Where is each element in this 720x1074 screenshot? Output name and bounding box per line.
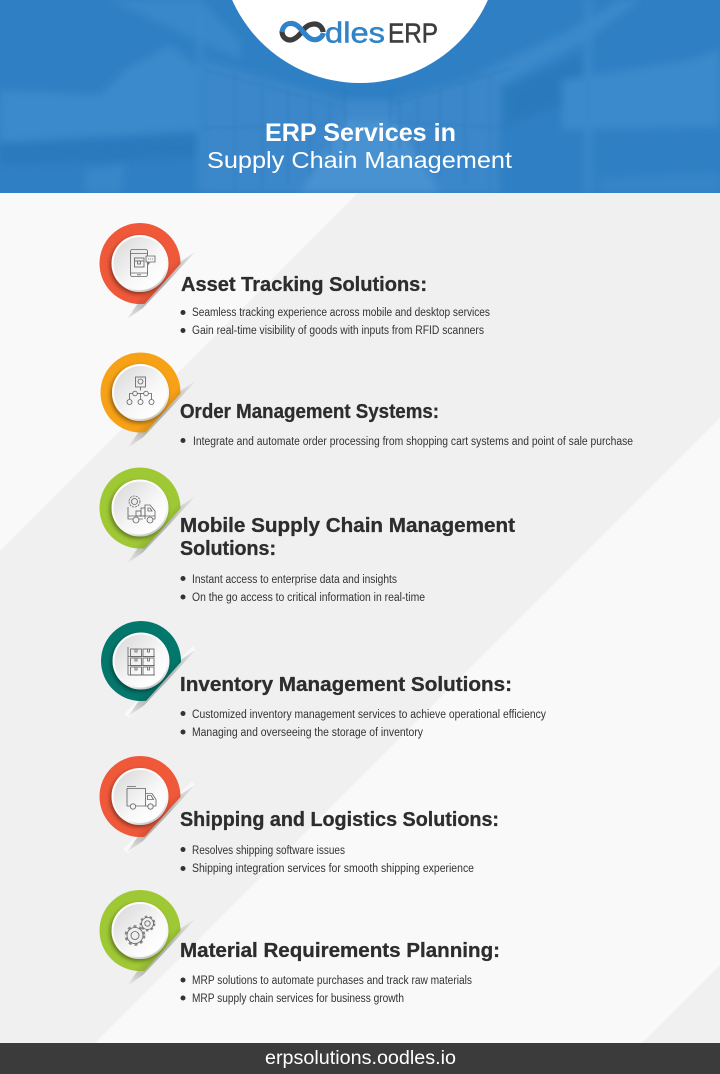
bullet list: Managing and overseeing the storage of inventory [192,727,423,739]
page background [0,193,720,1043]
heading: Order Management Systems: [180,400,439,423]
title [207,119,513,173]
bullet list: MRP supply chain services for business growth [192,993,404,1005]
badge: shipping [100,756,195,854]
icon: org tree [127,377,154,404]
bullet list: Seamless tracking experience across mobile and desktop services [192,307,490,319]
heading: Mobile Supply Chain Management [180,514,515,537]
heading: Solutions: [180,537,276,560]
icon: warehouse racks [128,647,155,675]
icon: delivery truck [127,786,156,809]
bullet list: On the go access to critical information in real-time [192,592,425,604]
heading: Shipping and Logistics Solutions: [180,808,499,831]
section: Order Management Systems [100,352,633,448]
icon: phone with parcel [130,250,155,276]
footer bar: erpsolutions.oodles.io [265,1048,456,1069]
title: Supply Chain Management [207,147,513,173]
header banner: blurred warehouse photo [0,0,720,193]
icon: gear and truck [128,496,155,523]
badge: material planning [100,890,195,986]
footer bar [0,1043,720,1074]
icon: gears [126,916,154,945]
badge: mobile supply chain [100,468,195,564]
heading: Asset Tracking Solutions: [181,273,427,296]
section: Asset Tracking Solutions [100,223,490,337]
badge: inventory [101,621,196,718]
bullet list [180,574,425,604]
white logo semicircle [220,0,500,83]
bullet list: MRP solutions to automate purchases and track raw materials [192,975,472,987]
bullet list [180,845,474,875]
bullet list [180,307,490,337]
icon: infinity mark [282,23,324,40]
logo: oodlesERP [282,18,438,50]
badge: asset tracking [100,223,195,319]
logo wordmark: dles [325,18,385,50]
bullet list [180,709,546,739]
shelf detail [205,68,510,190]
bullet list: Customized inventory management services to achieve operational efficiency [192,709,546,721]
heading: Material Requirements Planning: [180,939,500,962]
title: ERP Services in [265,119,456,147]
section: Material Requirements Planning [100,890,500,1005]
badge: order management [100,352,196,448]
heading: Inventory Management Solutions: [180,673,512,696]
bullet list [180,975,472,1005]
bullet list: Shipping integration services for smooth shipping experience [192,863,474,875]
heading [180,514,515,560]
section: Inventory Management Solutions [101,621,546,739]
section: Shipping and Logistics Solutions [100,756,499,875]
bullet list: Integrate and automate order processing from shopping cart systems and point of sale purchase [193,436,633,448]
bullet list: Gain real-time visibility of goods with inputs from RFID scanners [192,325,484,337]
section: Mobile Supply Chain Management Solutions [100,468,515,604]
logo: oodlesERP: ERP [388,18,438,48]
bullet list: Resolves shipping software issues [192,845,345,857]
bullet list: Instant access to enterprise data and insights [192,574,397,586]
